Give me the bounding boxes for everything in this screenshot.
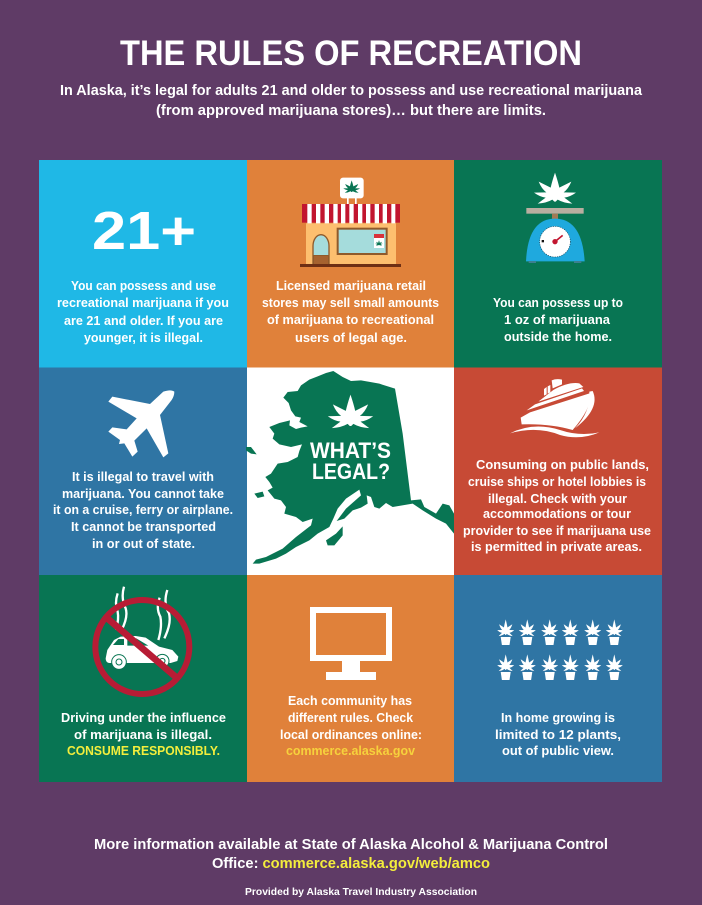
driving text: Driving under the influence [61,710,226,725]
home growing text [495,710,621,758]
local rules text [280,693,422,758]
panel: possession limit [454,160,662,368]
public consumption text: illegal. Check with your [488,491,627,506]
possession text [493,295,623,344]
public consumption text [463,457,651,554]
map label [310,438,391,484]
retail text: of marijuana to recreational [267,312,434,327]
footer information [94,837,608,872]
icon: no driving high [95,587,189,694]
title: THE RULES OF RECREATION [120,34,582,73]
possession text: outside the home. [504,329,612,344]
map label: WHAT’S [310,438,391,463]
panel: travel [39,368,247,575]
driving text: of marijuana is illegal. [74,727,212,742]
public consumption text: provider to see if marijuana use [463,523,651,538]
travel text [53,469,233,551]
home growing text: limited to 12 plants, [495,727,621,742]
footer information: More information available at State of Alaska Alcohol & Marijuana Control [94,837,608,853]
age text: You can possess and use [71,278,216,293]
public consumption text: cruise ships or hotel lobbies is [468,474,646,489]
panel: public consumption [454,368,662,575]
possession text: 1 oz of marijuana [504,312,611,327]
home growing text: In home growing is [501,710,615,725]
age text: recreational marijuana if you [57,295,229,310]
public consumption text: accommodations or tour [483,506,631,521]
local rules text: commerce.alaska.gov [286,743,416,758]
retail text: Licensed marijuana retail [276,278,426,293]
home growing text: out of public view. [502,743,614,758]
age text: are 21 and older. If you are [64,313,223,328]
travel text: it on a cruise, ferry or airplane. [53,502,233,517]
icon: scale with leaf [526,173,585,263]
local rules text: local ordinances online: [280,727,422,742]
travel text: It cannot be transported [71,519,216,534]
panel: retail stores [247,160,454,368]
possession text: You can possess up to [493,295,623,310]
panel: driving [39,575,247,782]
panel: age 21+ [39,160,247,368]
icon: leaf [328,395,373,428]
travel text: It is illegal to travel with [72,469,214,484]
driving text [61,710,226,758]
retail text: stores may sell small amounts [262,295,439,310]
age text [57,278,229,345]
local rules text: Each community has [288,693,412,708]
intro text: (from approved marijuana stores)… but there are limits. [156,103,546,119]
icon: store [300,178,401,267]
retail text: users of legal age. [295,330,407,345]
big number 21+: 21+ [92,201,196,261]
map label: LEGAL? [312,459,390,484]
icon: computer monitor [310,607,392,680]
icon: airplane [108,390,174,457]
intro text: In Alaska, it’s legal for adults 21 and older to possess and use recreational marijuana [60,83,643,99]
driving text: CONSUME RESPONSIBLY. [67,743,220,758]
panel: what's legal map [246,368,454,575]
intro text [60,83,643,119]
public consumption text: is permitted in private areas. [471,539,642,554]
icon: cruise ship [510,379,599,437]
icon: twelve plants [497,619,623,680]
footer information: Office: commerce.alaska.gov/web/amco [212,856,490,872]
local rules text: different rules. Check [288,710,414,725]
age text: younger, it is illegal. [84,330,203,345]
map: Alaska [246,371,454,564]
panel: local rules [247,575,454,782]
public consumption text: Consuming on public lands, [476,457,649,472]
credit line: Provided by Alaska Travel Industry Association [245,886,477,898]
travel text: marijuana. You cannot take [62,486,224,501]
panel: home growing [454,575,662,782]
travel text: in or out of state. [92,536,195,551]
retail text [262,278,439,345]
